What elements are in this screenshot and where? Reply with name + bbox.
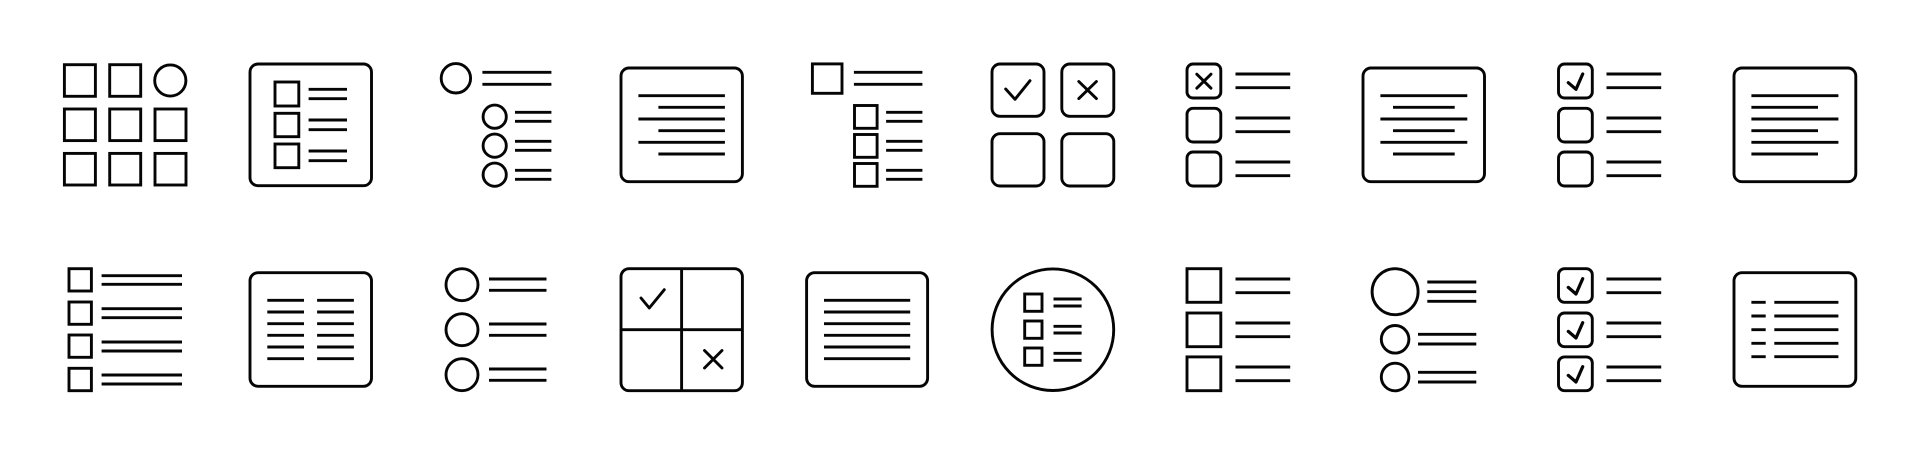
icon: four-item square list <box>69 269 182 391</box>
icon: checklist with check in first box <box>1558 64 1661 186</box>
icon: right-aligned text document <box>621 68 742 182</box>
icon: bulleted text document <box>1734 273 1856 386</box>
icon: hierarchy list with large and small circles <box>1372 269 1476 391</box>
icon: three-item large square list <box>1187 269 1290 391</box>
icon: checklist inside circle <box>992 269 1114 391</box>
icon: two-column text document <box>250 273 372 386</box>
icon: four-cell grid with check and cross <box>621 269 742 391</box>
icon: three-item circle list <box>446 269 546 391</box>
icon: fully checked checklist <box>1558 269 1661 391</box>
icon: checklist with cross in first box <box>1187 64 1290 186</box>
icon: nested list with squares <box>812 64 922 186</box>
icon: grid of squares with one circle <box>64 65 186 185</box>
icon: framed checklist with squares <box>250 64 372 186</box>
icon: justified text document <box>807 273 928 386</box>
icon: nested list with circles <box>441 64 551 186</box>
icon: centered text document <box>1363 68 1484 182</box>
icon: left-aligned text document <box>1734 68 1856 182</box>
icon: four rounded boxes with check and cross <box>992 64 1114 186</box>
